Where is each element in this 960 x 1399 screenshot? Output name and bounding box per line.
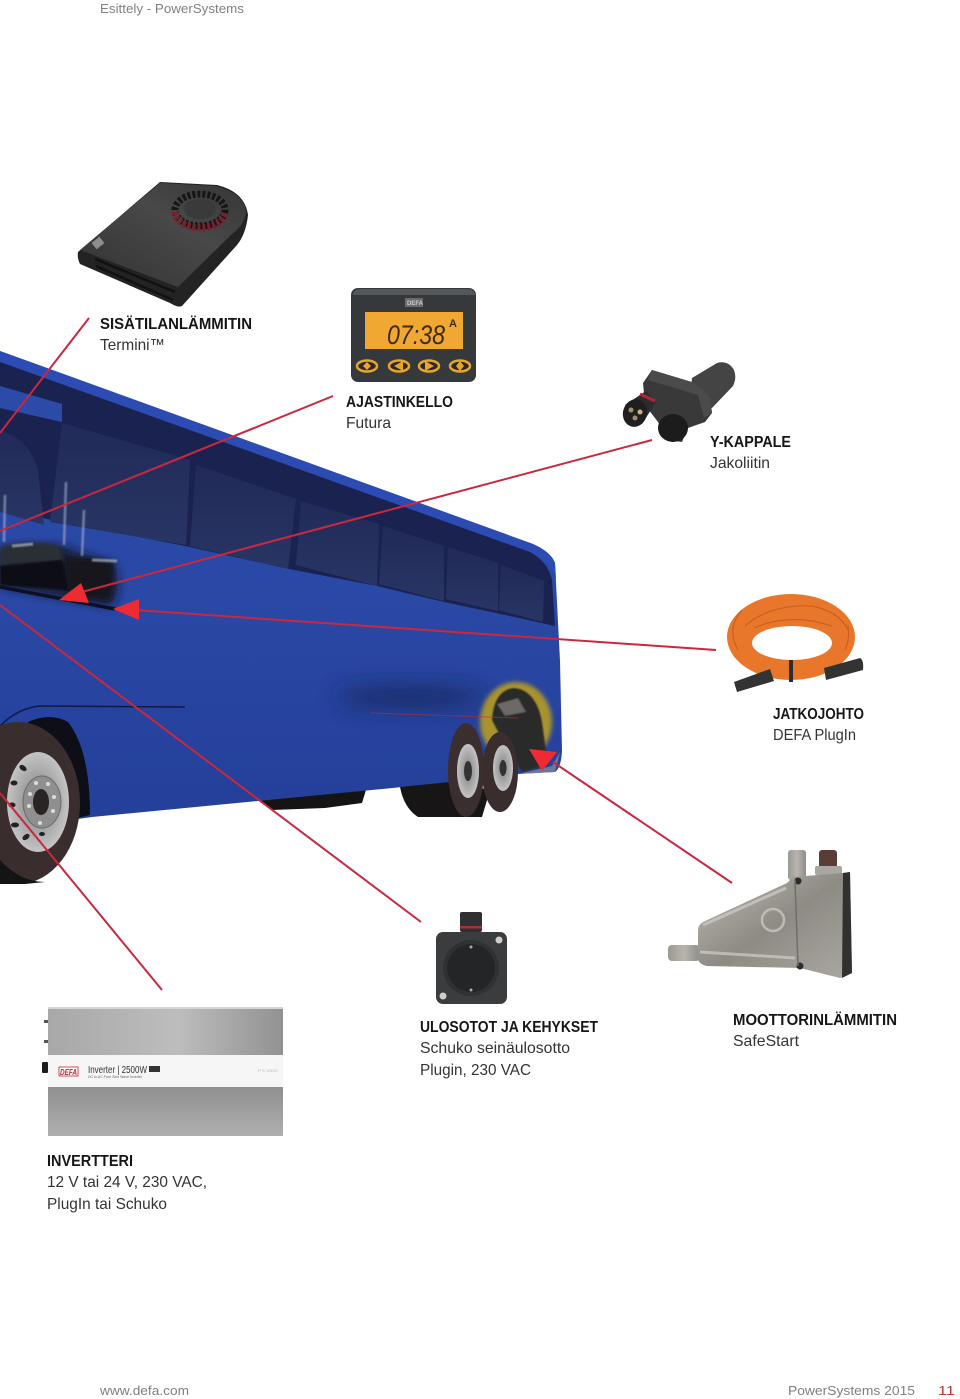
product: inverter: DC to AC Pure Sine Wave Inverter xyxy=(88,1075,143,1079)
label: Sisätilanlämmitin: SISÄTILANLÄMMITIN xyxy=(100,315,252,333)
label: Invertteri xyxy=(47,1153,207,1213)
rear bumper xyxy=(518,752,560,774)
front wheel arch xyxy=(28,717,90,822)
label: Moottorinlämmitin xyxy=(733,1011,897,1050)
label: Ulosotot ja kehykset xyxy=(420,1019,598,1079)
product: inverter: DEFA xyxy=(60,1068,77,1077)
window glass panes xyxy=(0,423,544,622)
footer: website: www.defa.com xyxy=(99,1383,189,1398)
label: Invertteri: PlugIn tai Schuko xyxy=(47,1196,167,1213)
arrowhead: to engine heater xyxy=(529,749,557,771)
side trim line xyxy=(0,706,185,726)
product: Y-piece connector xyxy=(620,362,735,442)
product: socket outlet xyxy=(436,912,507,1004)
product: timer Futura: A xyxy=(449,318,457,330)
bus illustration xyxy=(0,351,562,884)
label: Jatkojohto xyxy=(773,706,864,744)
rear wheels xyxy=(448,723,518,817)
label: Ulosotot ja kehykset: Plugin, 230 VAC xyxy=(420,1062,531,1079)
roof highlight xyxy=(0,351,556,578)
product: inverter: Inverter | 2500W xyxy=(88,1065,147,1076)
rear engine bay xyxy=(492,688,548,772)
rear engine glow xyxy=(480,682,552,762)
product: timer Futura: 07:38 xyxy=(387,320,445,350)
footer: page number: 11 xyxy=(938,1383,955,1398)
label: Jatkojohto: JATKOJOHTO xyxy=(773,706,864,723)
label: Ulosotot ja kehykset: ULOSOTOT JA KEHYKSET xyxy=(420,1019,598,1036)
label: Jatkojohto: DEFA PlugIn xyxy=(773,727,856,744)
product: orange extension cable xyxy=(727,594,863,692)
label: Ulosotot ja kehykset: Schuko seinäulosotto xyxy=(420,1040,570,1057)
pointer lines and arrowheads xyxy=(0,318,732,990)
footer: publication: PowerSystems 2015 xyxy=(788,1383,915,1398)
label: Y-kappale xyxy=(710,434,791,472)
rear tyre tread xyxy=(400,782,490,817)
window blue gap at left xyxy=(0,386,62,422)
arrowhead: to Y-piece location xyxy=(59,583,89,603)
label: Sisätilanlämmitin xyxy=(100,315,252,354)
product: inverter xyxy=(42,1007,283,1136)
label: Moottorinlämmitin: SafeStart xyxy=(733,1033,800,1050)
dark shadow above rear wheels xyxy=(335,686,485,708)
label: Sisätilanlämmitin: Termini™ xyxy=(100,337,165,354)
label: Invertteri: INVERTTERI xyxy=(47,1153,133,1170)
label: Ajastinkello xyxy=(346,394,453,432)
label: Y-kappale: Y-KAPPALE xyxy=(710,434,791,451)
product: timer Futura xyxy=(351,288,476,382)
label: Ajastinkello: AJASTINKELLO xyxy=(346,394,453,411)
label: Moottorinlämmitin: MOOTTORINLÄMMITIN xyxy=(733,1011,897,1029)
product: interior heater Termini xyxy=(78,182,248,307)
product: timer Futura: DEFA xyxy=(407,301,424,307)
heater glimpse in front section xyxy=(0,482,118,609)
label: Y-kappale: Jakoliitin xyxy=(710,455,770,472)
label: Invertteri: 12 V tai 24 V, 230 VAC, xyxy=(47,1174,207,1191)
arrowhead: to extension cable location xyxy=(113,599,139,620)
window frame band xyxy=(0,362,555,626)
bus rear undercarriage xyxy=(259,790,366,810)
label: Ajastinkello: Futura xyxy=(346,415,391,432)
product: engine heater SafeStart xyxy=(668,850,852,978)
header: running title: Esittely - PowerSystems xyxy=(100,1,245,16)
front wheel xyxy=(0,722,80,884)
product: inverter: PS 2500 xyxy=(258,1068,279,1073)
bus body xyxy=(0,351,562,830)
